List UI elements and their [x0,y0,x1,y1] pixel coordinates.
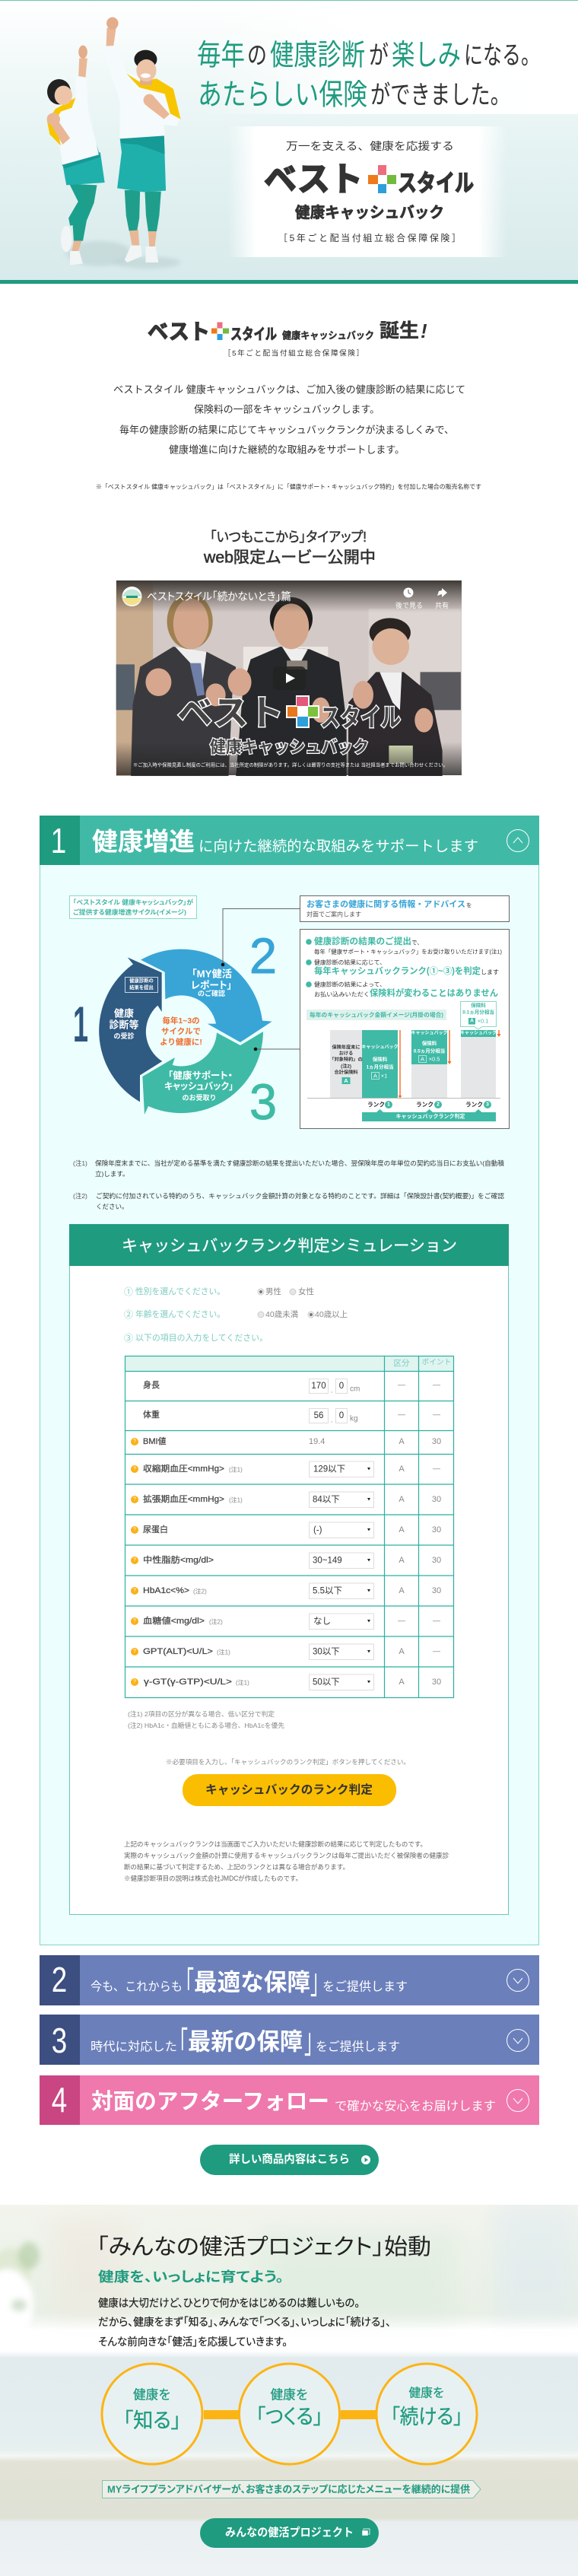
product logo panel: ［5年ごと配当付組立総合保障保険］ [278,232,461,243]
row: systolic: (注1) [229,1465,243,1473]
accordion 2: optimal coverage [40,1955,539,2005]
channel logo [122,587,141,606]
accordion 2: optimal coverage: 「 [176,1965,194,2005]
accordion 4: face-to-face follow-up: で確かな安心をお届けします [335,2100,496,2113]
bullet points: 健康診断の結果のご提出 [314,936,411,946]
row: urine protein: 尿蛋白 [143,1524,168,1534]
cycle step 3: 「健康サポート・ [168,1070,233,1081]
cycle step 1 [109,977,158,1040]
table header [394,1359,452,1368]
age question: 40歳以上 [315,1310,348,1319]
judge button [183,1774,396,1806]
advisor ribbon: MYライフプランアドバイザーが、お客さまのステップに応じたメニューを継続的に提供 [107,2483,470,2495]
row: triglycerides: ? [133,1558,136,1563]
rank 2 bar label: 保険料 [422,1039,437,1047]
cycle step 1: 健康診断の [129,977,154,984]
notes: ください。 [96,1203,129,1210]
rank 2 bar label: 0.5ヵ月分相当 [414,1047,445,1054]
bullet points: お払い込みいただく [314,991,370,998]
share button [435,588,449,609]
cycle caption: 「ベストスタイル 健康キャッシュバック」が [73,898,194,906]
table footnotes: (注1) 2項目の区分が異なる場合、低い区分で判定 [128,1710,275,1718]
row: diastolic: 84以下 [313,1494,340,1505]
row: height: cm [350,1385,360,1394]
rank 3 callout: 保険料 [471,1001,486,1009]
cycle center text: より健康に! [160,1037,202,1047]
movie heading [203,530,376,566]
accordion 2: optimal coverage: 今も、これからも [91,1980,183,1993]
video logo overlay: 健康キャッシュバック [210,738,369,756]
gender question [124,1286,314,1297]
advice box: を [466,902,472,908]
table footnotes: (注2) HbA1c・血糖値ともにある場合、HbA1cを優先 [128,1722,285,1729]
project subtitle: 健康を、いっしょに育てよう。 [98,2269,284,2285]
row: triglycerides: 中性脂肪<mg/dl> [143,1554,214,1565]
project title: 「みんなの健活プロジェクト」始動 [97,2234,431,2260]
simulation disclaimer [124,1840,449,1882]
row: gamma GT [131,1674,441,1690]
base premium label: 合計保険料 [335,1070,358,1076]
row: GPT [131,1644,440,1660]
accordion 4: face-to-face follow-up: 4 [52,2080,67,2120]
row: diastolic [131,1492,441,1508]
cycle step 3: キャッシュバック」 [164,1081,233,1092]
project description: だから、健康をまず「知る」、みんなで「つくる」、いっしょに「続ける」、 [98,2316,391,2328]
advice box: 対面でご案内します [306,910,361,918]
row: urine protein: (-) [313,1526,322,1535]
row: diastolic: 拡張期血圧<mmHg> [143,1493,224,1504]
row: systolic: ? [133,1467,136,1471]
simulation disclaimer: 断の結果に基づいて判定するため、上記のランクとは異なる場合があります。 [124,1862,349,1871]
input instruction: 以下の項目の入力をしてください。 [135,1333,268,1343]
rank labels: 2 [437,1102,440,1108]
intro logo heading [148,320,427,358]
cycle center text: 毎年1~3の [162,1016,200,1026]
row: urine protein: ? [133,1528,136,1532]
cycle diagram: 1 [73,996,88,1052]
accordion 2: optimal coverage: をご提供します [322,1980,408,1993]
intro footnote: ※「ベストスタイル 健康キャッシュバック」は「ベストスタイル」に「健康サポート・キャッシュバック特約」を付加した場合の販売名称です [96,482,481,490]
bullet points: 保険料が変わることはありません [370,987,498,998]
intro logo heading: ［5年ごと配当付組立総合保障保険］ [224,348,364,358]
row: blood glucose [131,1614,440,1630]
simulation panel [69,1224,509,1914]
row: blood glucose: ? [133,1619,136,1624]
gender question: 性別を選んでください。 [135,1286,225,1296]
intro body text: 毎年の健康診断の結果に応じてキャッシュバックランクが決まるしくみで、 [119,425,454,435]
row: HbA1c: HbA1c<%> [143,1586,189,1595]
rank labels: ランク [465,1100,483,1108]
bullet points: 毎年「健康サポート・キャッシュバック」をお受け取りいただけます(注1) [314,948,502,956]
row: triglycerides: A [399,1556,405,1565]
notes: 立)します。 [95,1170,129,1178]
cycle step 2: レポート」 [191,980,232,991]
notes: (注1) [73,1159,87,1167]
row: GPT: A [399,1647,405,1656]
row: height: . [331,1386,332,1395]
accordion 2: optimal coverage: 2 [52,1960,67,1999]
bullet points: 健康診断の結果によって、 [314,980,386,987]
input table [125,1356,454,1698]
rank labels [367,1100,491,1108]
chart caption: 毎年のキャッシュバック金額イメージ(月掛の場合) [310,1010,444,1018]
row: triglycerides: 30~149 [313,1557,342,1566]
row: triglycerides [131,1553,441,1569]
base premium label: 「対象特約」の [329,1056,363,1062]
accordion 3: latest coverage: 」 [304,2021,322,2060]
row: gamma GT: 50以下 [313,1677,340,1687]
intro body text: 保険料の一部をキャッシュバックします。 [194,403,380,415]
video title: ベストスタイル「続かないとき」篇 [147,590,291,603]
circle: continue: 「続ける」 [391,2406,462,2428]
rank 1 bar label: ×1 [381,1073,387,1079]
product logo panel: 万一を支える、健康を応援する [286,140,454,152]
product details button: 詳しい商品内容はこちら [229,2153,350,2166]
base premium label: 保険年度末に [332,1044,360,1050]
row: blood glucose: 血糖値<mg/dl> [143,1615,205,1626]
table header: 区分 [394,1359,410,1368]
notes [73,1159,505,1210]
age question: 40歳未満 [265,1310,299,1319]
intro logo heading: 健康キャッシュバック [282,330,374,341]
project description [98,2297,391,2348]
rank labels: 3 [486,1102,489,1108]
cycle diagram: 3 [249,1073,277,1130]
cycle diagram: 2 [249,927,277,984]
row: height: 170 [311,1382,326,1391]
product logo panel: スタイル [398,170,474,196]
simulation title: キャッシュバックランク判定シミュレーション [122,1237,457,1255]
age question [124,1309,348,1320]
row: BMI: BMI値 [143,1436,167,1446]
intro body text: 健康増進に向けた継続的な取組みをサポートします。 [169,444,405,455]
base premium label [329,1044,363,1084]
video logo overlay: スタイル [320,703,401,732]
play button [273,666,306,690]
circle: know [102,2364,202,2464]
cycle caption [70,896,196,919]
movie heading: web限定ムービー公開中 [203,549,376,566]
cashback bar chart [307,1001,500,1121]
row: HbA1c: A [399,1586,405,1595]
row: urine protein: 30 [432,1525,441,1534]
hero photo: two people cheering [47,17,180,269]
row: blood glucose: なし [313,1616,331,1627]
row: GPT: GPT(ALT)<U/L> [143,1647,213,1656]
row: weight: kg [350,1415,358,1423]
rank 3 callout: ×0.1 [478,1018,488,1024]
bullet points: します [481,969,499,975]
panel 1: health promotion [40,816,539,1945]
product logo panel [228,126,507,257]
row: diastolic: 30 [432,1495,441,1504]
row: systolic: 収縮期血圧<mmHg> [143,1463,224,1474]
row: BMI [131,1436,441,1446]
rank 3 callout: 0.1ヵ月分相当 [462,1009,494,1015]
rank 1 bar label [361,1044,399,1079]
cycle step 2: 「MY健活 [192,968,232,980]
circle: continue [376,2364,477,2464]
cycle step 1: 結果を提出 [129,984,154,991]
project description: 健康は大切だけど、ひとりで何かをはじめるのは難しいもの。 [98,2297,360,2309]
intro body text: ベストスタイル 健康キャッシュバックは、ご加入後の健康診断の結果に応じて [113,383,465,396]
row: height: 身長 [143,1379,160,1390]
headline: の [247,41,267,70]
video logo overlay [177,693,401,756]
row: HbA1c: 5.5以下 [313,1585,342,1596]
row: GPT: (注1) [217,1648,230,1655]
chart caption [306,1010,446,1020]
watch later button [395,587,423,609]
advice box: お客さまの健康に関する情報・アドバイス [306,898,465,909]
accordion 3: latest coverage: 最新の保障 [188,2028,303,2056]
headline: が [369,41,389,70]
row: HbA1c: (注2) [193,1587,207,1595]
headline: 毎年 [197,39,245,72]
accordion 4: face-to-face follow-up [40,2075,539,2125]
row: GPT: — [433,1648,440,1655]
row: weight: — [433,1410,440,1420]
simulation disclaimer: ※健康診断項目の説明は株式会社JMDCが作成したものです。 [124,1874,302,1882]
rank 1 bar label: キャッシュバック [361,1044,399,1050]
row: height [143,1379,440,1395]
bullet points [306,936,502,998]
headline [197,39,540,112]
cycle step 3: のお受取り [182,1093,217,1102]
row: BMI: A [399,1437,405,1446]
panel 1 header: 1 [51,821,66,860]
project button: みんなの健活プロジェクト [225,2526,354,2539]
accordion 3: latest coverage: 3 [52,2021,67,2060]
video logo overlay: ベスト [177,693,284,733]
accordion 3: latest coverage: をご提供します [316,2040,400,2054]
row: gamma GT: 30 [432,1678,441,1687]
simulation disclaimer: 上記のキャッシュバックランクは当画面でご入力いただいた健康診断の結果に応じて判定したものです。 [124,1840,427,1848]
row: diastolic: (注1) [229,1496,243,1503]
table header: ポイント [421,1359,452,1366]
simulation title [69,1224,509,1266]
product logo panel: 健康キャッシュバック [295,204,444,221]
product details button [200,2145,379,2175]
row: blood glucose: (注2) [209,1617,223,1625]
simulation instruction: ※必要項目を入力し、「キャッシュバックのランク判定」ボタンを押してください。 [166,1758,410,1766]
product logo panel: ベスト [264,161,363,198]
row: weight: 0 [339,1411,344,1420]
age question: 年齢を選んでください。 [135,1309,225,1319]
project background [0,2205,578,2576]
row: weight: — [398,1410,405,1420]
intro logo heading: 誕生 [380,320,419,342]
bullet points: 健康診断の結果に応じて、 [314,959,386,966]
headline: ができました。 [370,81,510,110]
gender question: ① [124,1286,133,1297]
row: weight: 56 [314,1411,323,1420]
rank 2 bar label: A [421,1056,424,1062]
share button: 共有 [435,601,449,609]
row: weight: 体重 [143,1409,160,1420]
row: diastolic: ? [133,1497,136,1502]
row: height: 0 [339,1382,344,1391]
cycle diagram [73,908,300,1130]
row: blood glucose: — [433,1617,440,1625]
circle: create: 健康を [271,2387,309,2403]
video thumbnail [116,580,462,776]
cycle step 1: 健康 [114,1007,134,1019]
circle: create [239,2364,339,2464]
circle: create: 「つくる」 [256,2406,322,2428]
row: HbA1c: 30 [432,1586,441,1595]
headline: 健康診断 [270,39,365,72]
circle: know: 「知る」 [123,2409,181,2432]
accordion 2: optimal coverage: 」 [310,1961,328,2001]
intro body text [113,383,465,455]
accordion 3: latest coverage [40,2015,539,2065]
gender question: 男性 [265,1286,281,1296]
cycle center text [160,1016,202,1047]
row: height: — [433,1382,440,1389]
cycle center text: サイクルで [161,1027,201,1036]
step circles [102,2364,477,2464]
row: height: — [398,1382,405,1389]
accordion 3: latest coverage: 時代に対応した [91,2040,177,2054]
bullet points: で、 [411,939,423,946]
judge button: キャッシュバックのランク判定 [205,1783,373,1797]
panel 1 header [40,816,539,865]
gender question: 女性 [298,1286,314,1296]
project description: そんな前向きな「健活」を応援していきます。 [98,2336,287,2348]
row: weight [143,1409,440,1424]
row: diastolic: A [399,1495,405,1504]
cycle step 2 [191,968,232,997]
advisor ribbon [102,2480,481,2498]
watch later button: 後で見る [395,601,423,609]
headline: になる。 [464,41,540,70]
age question: ② [124,1309,133,1320]
row: urine protein: A [399,1525,405,1534]
project button [200,2518,379,2548]
cycle step 1: 診断等 [109,1019,139,1030]
rank labels: ランク [416,1100,434,1108]
row: systolic: A [399,1465,405,1474]
cycle step 2: のご確認 [198,989,225,997]
video disclaimer: ※ご加入時や保険見直し制度のご利用には、当社所定の制限があります。詳しくは最寄りの支社等または 当社担当者までお問い合わせください。 [133,761,448,768]
cashback explanation box [300,930,510,1129]
base premium label: おける [339,1051,353,1056]
row: systolic [131,1461,440,1477]
notes: ご契約に付加されている特約のうち、キャッシュバック金額計算の対象となる特約のことです。詳細は「保険設計書(契約概要)」をご確認 [96,1192,505,1200]
rank judgement band: キャッシュバックランク判定 [395,1112,465,1120]
row: GPT: ? [133,1649,136,1654]
advice box [300,896,510,922]
row: gamma GT: ? [133,1680,136,1684]
row: HbA1c [131,1583,441,1599]
headline: あたらしい保険 [198,78,367,112]
accordion 4: face-to-face follow-up: 対面のアフターフォロー [91,2089,329,2114]
rank 2 bar label: キャッシュバック [411,1030,448,1036]
rank 1 bar label: 1ヵ月分相当 [366,1064,394,1070]
rank 2 bar label: ×0.5 [429,1056,440,1062]
row: BMI: ? [133,1439,136,1444]
rank 3 bar label: キャッシュバック [460,1030,497,1036]
rank 1 bar label: A [373,1073,377,1079]
project section [0,2205,578,2576]
cycle caption: ご提供する健康増進サイクル(イメージ) [73,908,186,916]
movie heading: 「いつもここから」タイアップ! [210,530,367,545]
rank judgement band [362,1109,496,1121]
intro logo heading: スタイル [230,326,277,343]
row: gamma GT: A [399,1678,405,1687]
row: weight: . [331,1417,332,1424]
rank 2 bar label [411,1030,448,1062]
circle: continue: 健康を [409,2386,444,2399]
cycle step 1: の受診 [113,1032,135,1040]
row: urine protein [131,1522,441,1538]
rank 1 bar label: 保険料 [373,1056,388,1062]
row: gamma GT: γ-GT(γ-GTP)<U/L> [144,1678,232,1687]
input instruction: ③ [124,1333,133,1344]
cycle step 3 [164,1070,233,1102]
row: triglycerides: 30 [432,1556,441,1565]
notes: (注2) [73,1192,87,1200]
accordion 2: optimal coverage: 最適な保障 [194,1969,310,1996]
row: gamma GT: (注1) [236,1678,249,1686]
base premium label: (注2) [341,1064,351,1070]
circle: know: 健康を [133,2387,171,2403]
rank labels: 1 [387,1102,390,1108]
row: systolic: — [433,1465,440,1473]
table footnotes [128,1710,285,1729]
connector lines [221,908,300,1051]
headline: 楽しみ [392,39,461,72]
row: systolic: 129以下 [313,1464,345,1474]
rank 3 callout: A [470,1018,474,1024]
intro logo heading: ベスト [148,320,210,344]
rank labels: ランク [367,1100,385,1108]
panel 1 header: 健康増進 [92,828,195,855]
hero banner [0,0,578,284]
row: blood glucose: — [398,1617,405,1625]
intro logo heading: ! [421,320,427,342]
bullet points: 毎年キャッシュバックランク(①~③)を判定 [314,965,481,976]
row: BMI: 19.4 [309,1437,325,1446]
row: GPT: 30以下 [313,1646,340,1657]
base premium label: A [344,1077,348,1084]
simulation disclaimer: 実際のキャッシュバック金額の計算に使用するキャッシュバックランクは毎年ご提出いただく被保険者の健康診 [124,1851,449,1859]
accordion 3: latest coverage: 「 [170,2025,188,2065]
notes: 保険年度末までに、当社が定める基準を満たす健康診断の結果を提出いただいた場合、翌保険年度の年単位の契約応当日にお支払い(自動積 [95,1159,504,1167]
panel 1 header: に向けた継続的な取組みをサポートします [198,838,478,855]
row: HbA1c: ? [133,1589,136,1593]
row: BMI: 30 [432,1437,441,1446]
rank 3 callout [461,1001,496,1029]
